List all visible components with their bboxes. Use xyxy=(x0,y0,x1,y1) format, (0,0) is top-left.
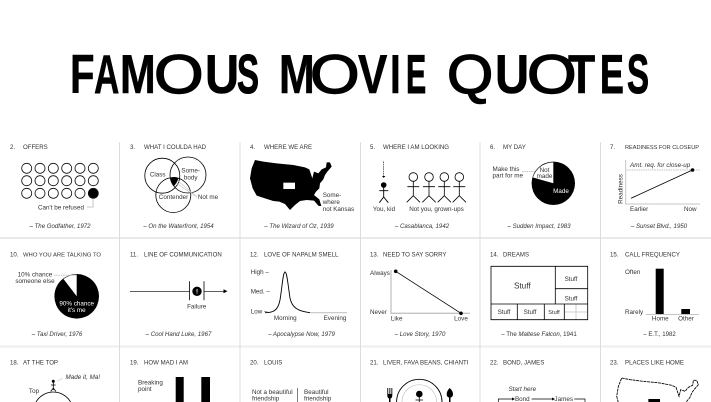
line chart xyxy=(618,160,700,213)
line diagram: Failure xyxy=(187,304,207,310)
heading: 7. xyxy=(610,144,615,151)
flow diagram xyxy=(498,386,585,402)
line diagram xyxy=(130,281,228,310)
heading: HOW MAD I AM xyxy=(144,360,188,366)
credit: – The Wizard of Oz, 1939 xyxy=(263,223,334,230)
title: E xyxy=(406,43,426,105)
panel: liver, fava beans, chianti xyxy=(370,360,469,402)
stick figure: kid xyxy=(379,182,388,203)
heading: WHERE WE ARE xyxy=(264,144,312,151)
title: M xyxy=(279,43,314,105)
arrow: looking down xyxy=(382,162,385,178)
heading: 19. xyxy=(130,360,138,366)
bar chart: Breaking xyxy=(138,380,163,386)
flow diagram: Start here xyxy=(508,386,537,393)
line chart: Evening xyxy=(324,315,347,322)
heading: 10. xyxy=(10,252,18,259)
heading: 14. xyxy=(490,252,498,259)
dot grid xyxy=(22,163,98,198)
pie chart: Made xyxy=(553,188,569,195)
credit: – Casablanca, 1942 xyxy=(394,223,450,230)
pie chart: it's me xyxy=(68,307,86,314)
heading: CALL FREQUENCY xyxy=(625,252,680,259)
venn diagram: Class xyxy=(150,172,166,178)
title: S xyxy=(626,43,649,105)
line chart: Now xyxy=(684,206,697,213)
pie chart: 90% chance xyxy=(59,300,95,308)
title xyxy=(70,43,649,105)
pie chart xyxy=(532,162,575,205)
treemap: Stuff xyxy=(565,276,578,283)
venn diagram: Contender xyxy=(159,194,188,201)
hill chart: Made it, Ma! xyxy=(66,374,100,381)
heading: WHAT I COULDA HAD xyxy=(144,144,207,151)
title: U xyxy=(205,43,239,105)
title: O xyxy=(527,43,577,105)
heading: DREAMS xyxy=(503,252,529,259)
line chart: High – xyxy=(251,269,269,276)
label: somewhere not kansas: not Kansas xyxy=(323,206,354,213)
treemap: Stuff xyxy=(565,296,578,302)
pie chart: Not xyxy=(540,167,550,174)
line chart: Always xyxy=(370,270,390,277)
heading: offers: OFFERS xyxy=(23,144,48,151)
bar chart: Home xyxy=(652,316,669,322)
line chart xyxy=(370,270,470,322)
bar chart: Often xyxy=(625,269,641,276)
panel: where i am looking xyxy=(370,144,466,230)
pie chart xyxy=(54,274,99,319)
credit: – Sudden Impact, 1983 xyxy=(506,223,571,230)
label: can't be refused: Can't be refused xyxy=(38,204,84,212)
heading: READINESS FOR CLOSEUP xyxy=(625,145,699,151)
bar chart: point xyxy=(138,386,152,393)
treemap xyxy=(491,266,588,320)
panel: places like home xyxy=(610,360,698,402)
panel: call frequency xyxy=(610,252,699,338)
title: O xyxy=(310,43,360,105)
panel: bond, james xyxy=(490,360,585,402)
treemap: Stuff xyxy=(548,310,560,316)
line chart: Readiness xyxy=(618,174,624,204)
callout: make this part for me: part for me xyxy=(492,173,523,180)
heading: PLACES LIKE HOME xyxy=(625,360,684,366)
panel: readiness for closeup xyxy=(610,144,700,230)
panel: what i coulda had xyxy=(130,144,219,230)
panel: louis xyxy=(250,360,332,402)
line chart: Earlier xyxy=(630,206,648,213)
heading: 4. xyxy=(250,144,255,151)
quadrant labels: Beautiful xyxy=(304,389,329,396)
panel: need to say sorry xyxy=(370,252,470,338)
heading: LINE OF COMMUNICATION xyxy=(144,252,222,259)
panel: who you are talking to xyxy=(10,252,101,338)
line chart: Like xyxy=(391,316,403,322)
title: T xyxy=(568,43,595,105)
venn diagram: body xyxy=(184,174,198,182)
panel: offers xyxy=(10,144,98,230)
plate xyxy=(397,379,442,402)
heading: 22. xyxy=(490,360,498,366)
credit: – On the Waterfront, 1954 xyxy=(142,223,214,230)
panel: my day xyxy=(490,144,575,230)
heading: offers: 2. xyxy=(10,144,15,151)
venn diagram: Some- xyxy=(181,168,200,174)
icon: spoon xyxy=(447,388,453,402)
bar chart: Other xyxy=(678,316,694,322)
title: M xyxy=(120,43,155,105)
credit: – Apocalypse Now, 1979 xyxy=(267,331,336,338)
line chart: Love xyxy=(454,316,468,322)
line chart xyxy=(251,269,347,322)
heading: NEED TO SAY SORRY xyxy=(383,252,446,259)
label: somewhere not kansas: Some- xyxy=(323,192,341,199)
treemap: Stuff xyxy=(524,309,537,316)
callout: 10% chance: 10% chance xyxy=(18,272,53,278)
heading: WHO YOU ARE TALKING TO xyxy=(23,253,101,259)
panel: line of communication xyxy=(130,252,228,338)
bar chart xyxy=(625,269,699,322)
panel: love of napalm smell xyxy=(250,252,347,338)
heading: 21. xyxy=(370,360,378,366)
stick figures: grown-ups xyxy=(407,173,466,202)
callout: make this part for me: Make this xyxy=(492,166,519,173)
heading: 15. xyxy=(610,252,618,259)
pie chart: made xyxy=(537,173,553,180)
title: A xyxy=(94,43,119,105)
title: U xyxy=(495,43,529,105)
title: F xyxy=(70,43,95,105)
heading: 12. xyxy=(250,252,258,259)
heading: LOUIS xyxy=(264,360,282,366)
line diagram: ! xyxy=(196,289,198,296)
title: I xyxy=(390,43,401,105)
heading: 23. xyxy=(610,360,618,366)
heading: 20. xyxy=(250,360,258,366)
heading: 6. xyxy=(490,144,495,151)
heading: MY DAY xyxy=(503,144,526,151)
callout: 10% chance: someone else xyxy=(15,278,55,285)
venn diagram xyxy=(145,157,219,212)
panel: at the top xyxy=(10,360,100,402)
hill chart: Top xyxy=(29,388,40,395)
credit: – Taxi Driver, 1976 xyxy=(31,331,83,338)
title: V xyxy=(358,43,387,105)
line chart: Amt. req. for close-up xyxy=(629,162,691,169)
credit: – E.T., 1982 xyxy=(643,331,676,338)
venn diagram: Not me xyxy=(198,194,219,201)
treemap: Stuff xyxy=(514,282,531,290)
label: not you, grown-ups: Not you, grown-ups xyxy=(409,206,464,213)
credit: – Sunset Blvd., 1950 xyxy=(630,223,688,230)
title: Q xyxy=(447,43,493,105)
heading: LIVER, FAVA BEANS, CHIANTI xyxy=(383,360,469,366)
line chart: Never xyxy=(370,309,387,316)
heading: 5. xyxy=(370,144,375,151)
icon: fork xyxy=(387,388,392,402)
panel: where we are xyxy=(250,144,354,230)
heading: WHERE I AM LOOKING xyxy=(383,144,449,151)
quadrant labels: Not a beautiful xyxy=(252,389,293,396)
callout: make this part for me xyxy=(492,166,535,180)
panel: how mad i am xyxy=(130,360,210,402)
hill chart xyxy=(29,374,100,402)
line chart: Low – xyxy=(251,308,268,316)
credit: – Love Story, 1970 xyxy=(394,331,446,338)
heading: 18. xyxy=(10,360,18,366)
treemap: Stuff xyxy=(498,309,511,316)
heading: LOVE OF NAPALM SMELL xyxy=(264,252,339,259)
heading: 3. xyxy=(130,144,135,151)
line chart: Morning xyxy=(274,315,297,322)
us map outline xyxy=(616,378,699,402)
bar chart xyxy=(138,377,210,402)
label: you, kid: You, kid xyxy=(373,206,396,213)
callout: 10% chance xyxy=(15,272,76,285)
title: O xyxy=(154,43,204,105)
credit: – Cool Hand Luke, 1967 xyxy=(145,331,212,338)
label: somewhere not kansas: where xyxy=(322,199,340,206)
credit: – The Maltese Falcon, 1941 xyxy=(501,331,577,338)
credit: – The Godfather, 1972 xyxy=(29,223,91,230)
line chart: Med. – xyxy=(251,288,270,295)
quadrant labels xyxy=(252,388,332,402)
heading: AT THE TOP xyxy=(23,360,58,366)
panel: dreams xyxy=(490,252,588,338)
bar chart: Rarely xyxy=(625,309,644,316)
heading: BOND, JAMES xyxy=(503,360,544,366)
heading: 11. xyxy=(130,252,138,259)
title: S xyxy=(237,43,259,105)
heading: 13. xyxy=(370,252,378,259)
title: E xyxy=(600,43,624,105)
us map xyxy=(250,160,332,210)
